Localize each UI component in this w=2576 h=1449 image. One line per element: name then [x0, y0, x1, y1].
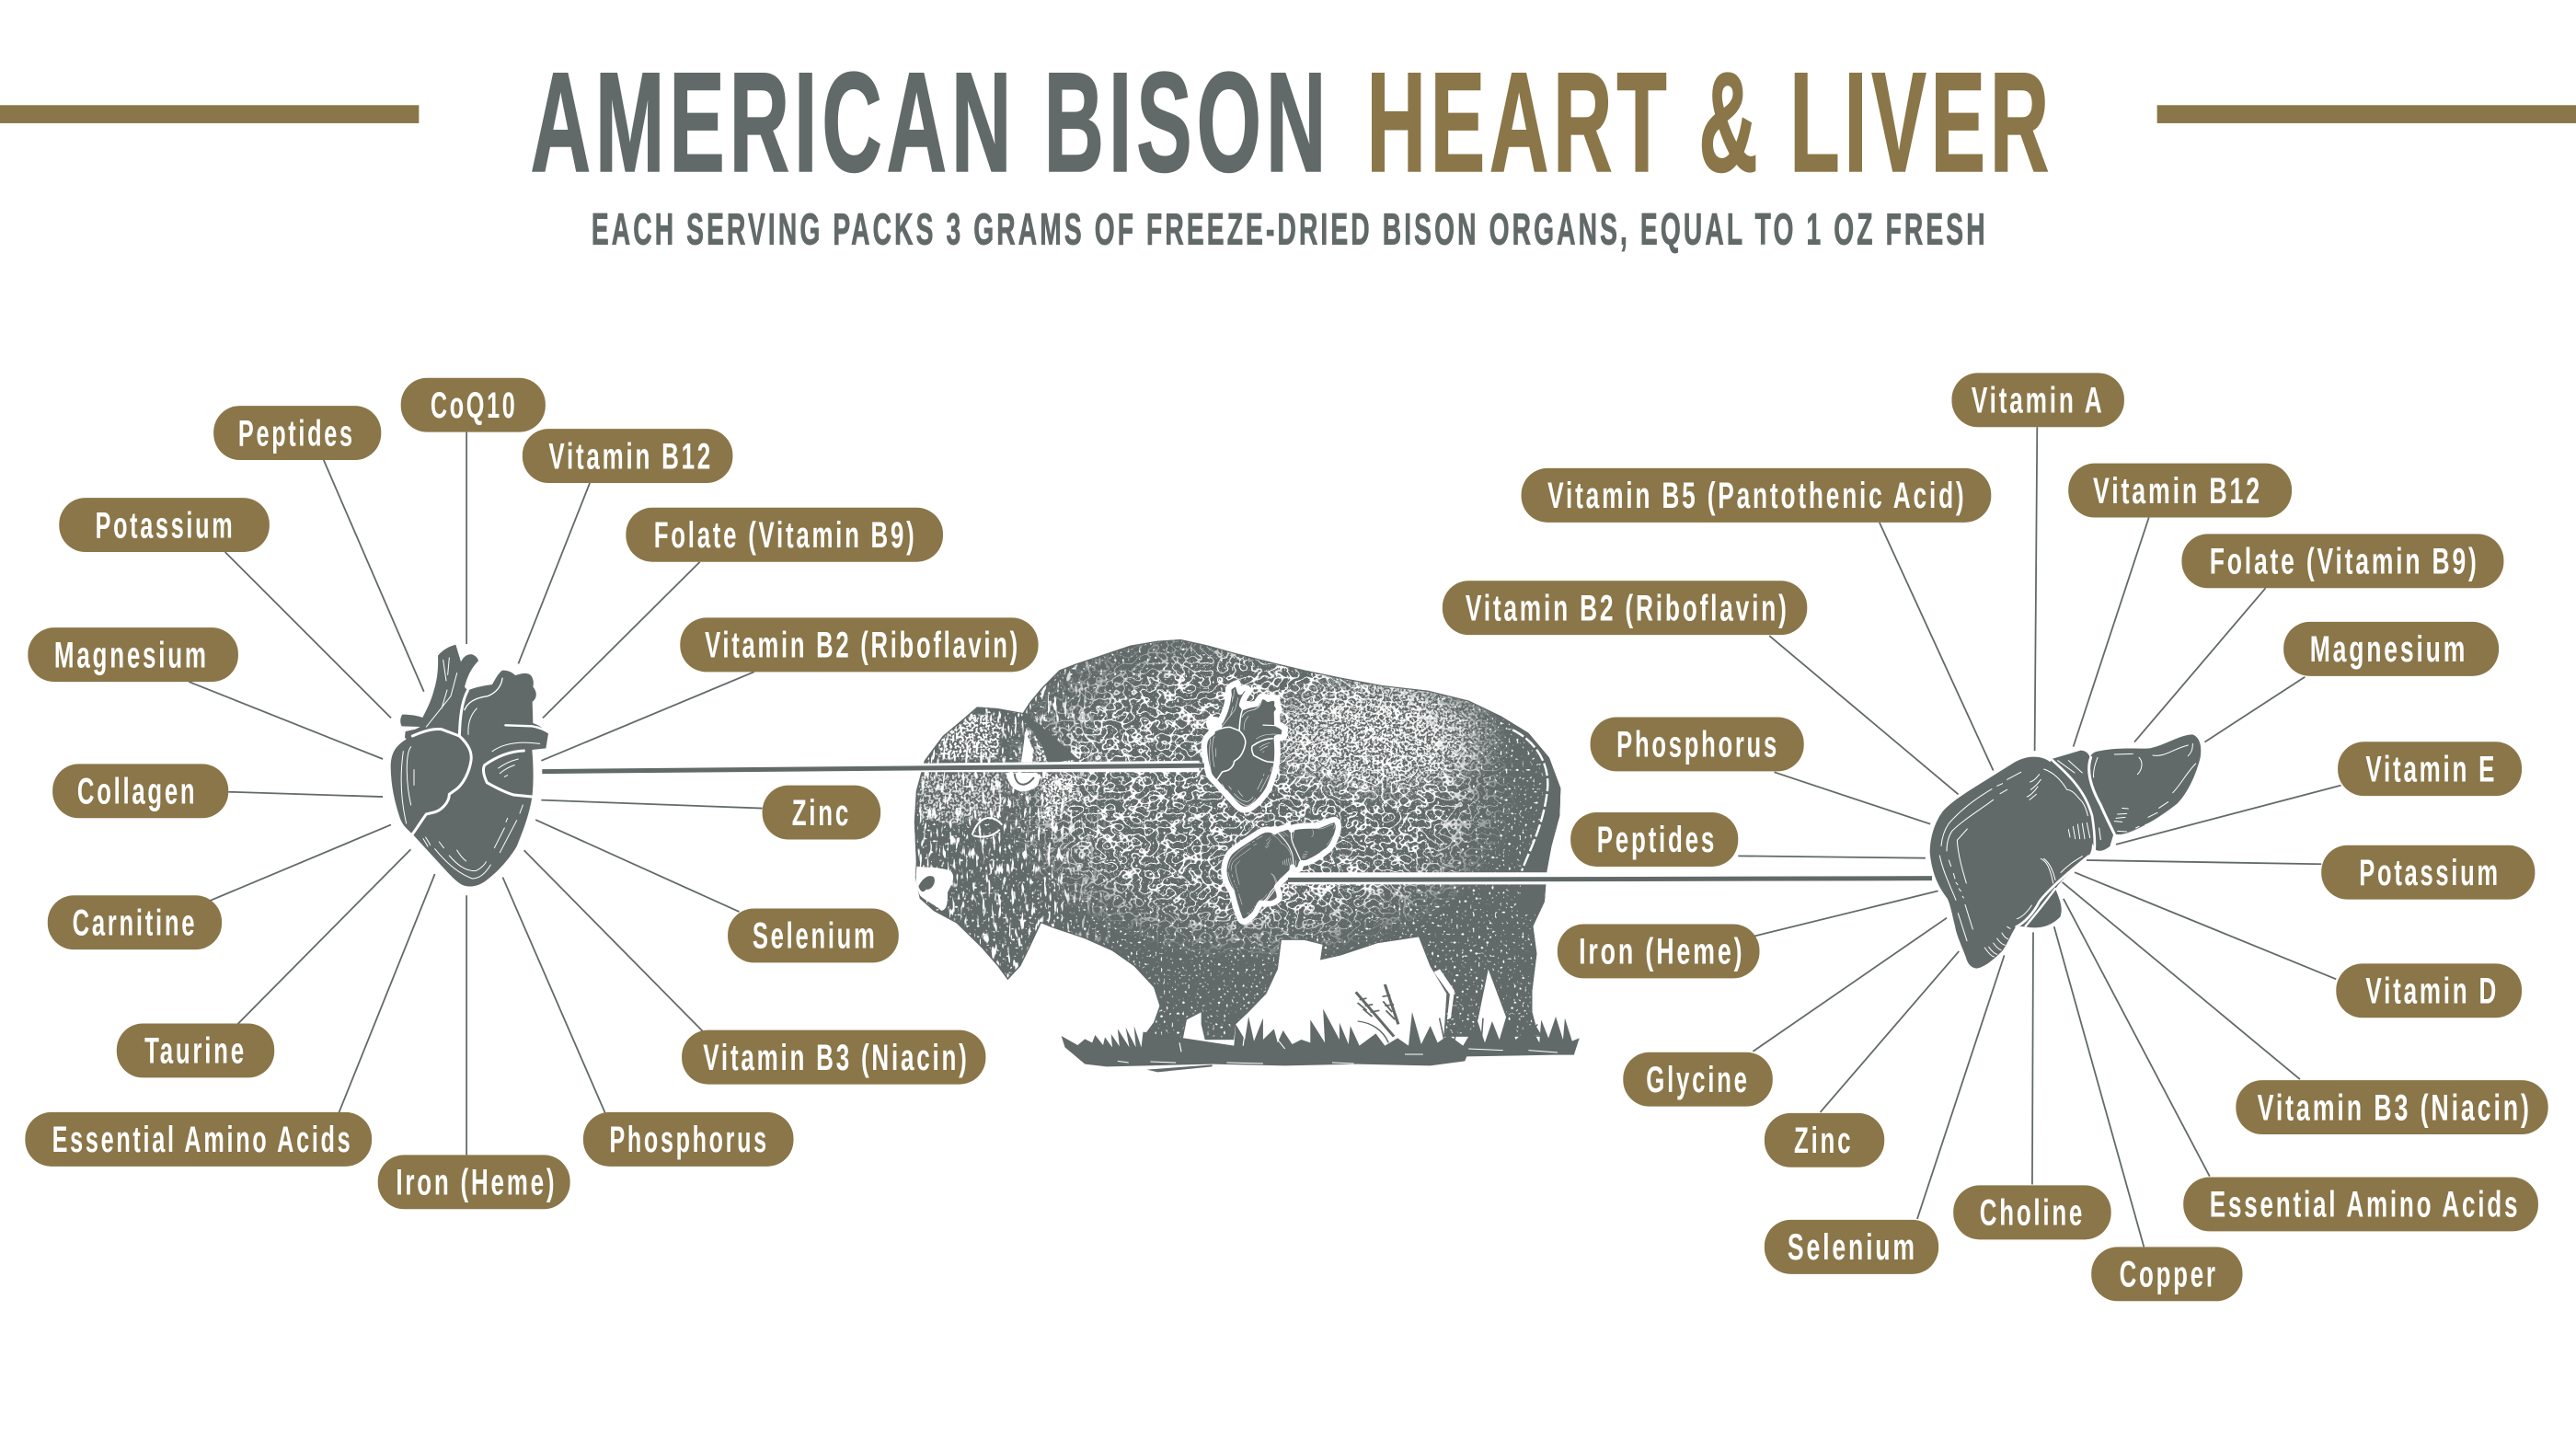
pill: Folate — [626, 508, 943, 562]
pill: Magnesium — [2283, 622, 2499, 676]
pill: Peptides: Peptides — [238, 412, 355, 454]
pill: Taurine — [117, 1023, 274, 1077]
pill: Magnesium: Magnesium — [2310, 628, 2467, 670]
pill: Vitamin D: Vitamin D — [2365, 971, 2499, 1012]
pill: Zinc: Zinc — [1794, 1120, 1853, 1161]
pill: Peptides: Peptides — [1597, 819, 1717, 860]
pill: Carnitine — [48, 895, 222, 949]
header rule: right — [2157, 105, 2576, 123]
pill: Essential Amino Acids — [25, 1112, 372, 1167]
heart pointer line — [542, 765, 1204, 772]
pill: Choline: Choline — [1980, 1192, 2085, 1234]
bison leg highlights — [1433, 969, 1455, 1019]
pill: Copper — [2091, 1247, 2243, 1301]
pill: Selenium: Selenium — [1788, 1226, 1917, 1268]
pill: Taurine: Taurine — [144, 1030, 247, 1072]
pill: Phosphorus: Phosphorus — [609, 1119, 769, 1160]
pill: Iron (Heme) — [378, 1155, 570, 1209]
pill: Vitamin A: Vitamin A — [1972, 380, 2104, 421]
pill: Selenium — [1765, 1220, 1938, 1274]
pill: Vitamin E: Vitamin E — [2365, 748, 2497, 789]
pill: Essential Amino Acids: Essential Amino Acids — [52, 1119, 352, 1160]
pill: Essential Amino Acids — [2183, 1177, 2538, 1231]
pill: Selenium: Selenium — [753, 915, 878, 957]
pill: Magnesium: Magnesium — [54, 634, 209, 675]
pill: Collagen: Collagen — [77, 771, 197, 812]
pill: Phosphorus: Phosphorus — [1616, 724, 1779, 765]
pill: CoQ10: CoQ10 — [431, 385, 517, 426]
pill: Vitamin B2: Vitamin B2 (Riboflavin) — [1466, 587, 1789, 628]
pill: Selenium — [728, 909, 899, 962]
liver location on bison — [1224, 820, 1339, 922]
illustration: bison — [887, 625, 1593, 1072]
pill: Choline — [1953, 1185, 2111, 1239]
bison rump highlight — [1512, 730, 1547, 871]
pill: Potassium: Potassium — [96, 504, 235, 546]
pill: Potassium — [59, 498, 270, 552]
liver pointer line — [1288, 879, 1932, 880]
pill: Iron (Heme): Iron (Heme) — [1579, 931, 1744, 972]
pill: Folate: Folate (Vitamin B9) — [654, 514, 916, 556]
pill: Folate — [2181, 534, 2503, 588]
pill: Vitamin B12: Vitamin B12 — [2093, 470, 2262, 512]
pill: Vitamin E — [2338, 742, 2522, 796]
pill: Vitamin A — [1951, 373, 2124, 427]
pill: Zinc: Zinc — [792, 792, 851, 834]
pill: Phosphorus — [583, 1112, 793, 1167]
pill: Phosphorus — [1591, 717, 1804, 771]
heart location on bison — [1204, 683, 1286, 810]
pill: Zinc — [1765, 1113, 1884, 1167]
pill: Vitamin B3: Vitamin B3 (Niacin) — [703, 1037, 970, 1078]
pill: Vitamin B12 — [523, 429, 732, 483]
connector lines: liver nutrients — [1738, 427, 2341, 1247]
pill: Glycine: Glycine — [1646, 1059, 1750, 1100]
liver pointer halo — [1288, 872, 1560, 884]
pill: Magnesium — [28, 627, 238, 682]
title: AMERICAN BISON — [531, 43, 1330, 201]
pill: Peptides — [213, 406, 381, 460]
pill: Iron (Heme) — [1558, 924, 1759, 978]
icon: liver — [1930, 734, 2201, 969]
pill: Zinc — [763, 786, 880, 839]
pill: Glycine — [1623, 1052, 1773, 1107]
pill: Carnitine: Carnitine — [73, 902, 197, 943]
pill: Peptides — [1570, 812, 1738, 867]
grass — [1062, 984, 1580, 1072]
pill: Vitamin B5: Vitamin B5 (Pantothenic Acid) — [1547, 475, 1967, 516]
pill: Vitamin B3 — [682, 1030, 985, 1085]
title: HEART & LIVER — [1367, 43, 2053, 201]
pill: CoQ10 — [401, 378, 546, 432]
pill: Iron (Heme): Iron (Heme) — [396, 1162, 557, 1203]
pill: Vitamin B2 — [680, 617, 1039, 672]
connector lines: heart nutrients — [189, 432, 763, 1155]
pill: Potassium: Potassium — [2359, 852, 2501, 893]
bison face details — [916, 731, 1039, 911]
pill: Vitamin B12 — [2068, 464, 2292, 517]
pill: Vitamin B2: Vitamin B2 (Riboflavin) — [705, 625, 1020, 666]
bison fur texture — [914, 639, 1560, 1040]
pill: Collagen — [52, 764, 228, 818]
pill: Vitamin B3 — [2236, 1080, 2548, 1134]
header rule: left — [0, 105, 419, 123]
pill: Vitamin B12: Vitamin B12 — [548, 435, 713, 477]
pill: Vitamin B5 — [1522, 468, 1991, 523]
pill: Copper: Copper — [2120, 1254, 2218, 1295]
icon: heart — [391, 645, 550, 887]
heart pointer halo — [920, 761, 1200, 772]
bison body silhouette — [914, 639, 1560, 1040]
pill: Vitamin B2 — [1443, 581, 1807, 635]
pill: Potassium — [2321, 845, 2535, 900]
pill: Vitamin D — [2336, 963, 2522, 1018]
